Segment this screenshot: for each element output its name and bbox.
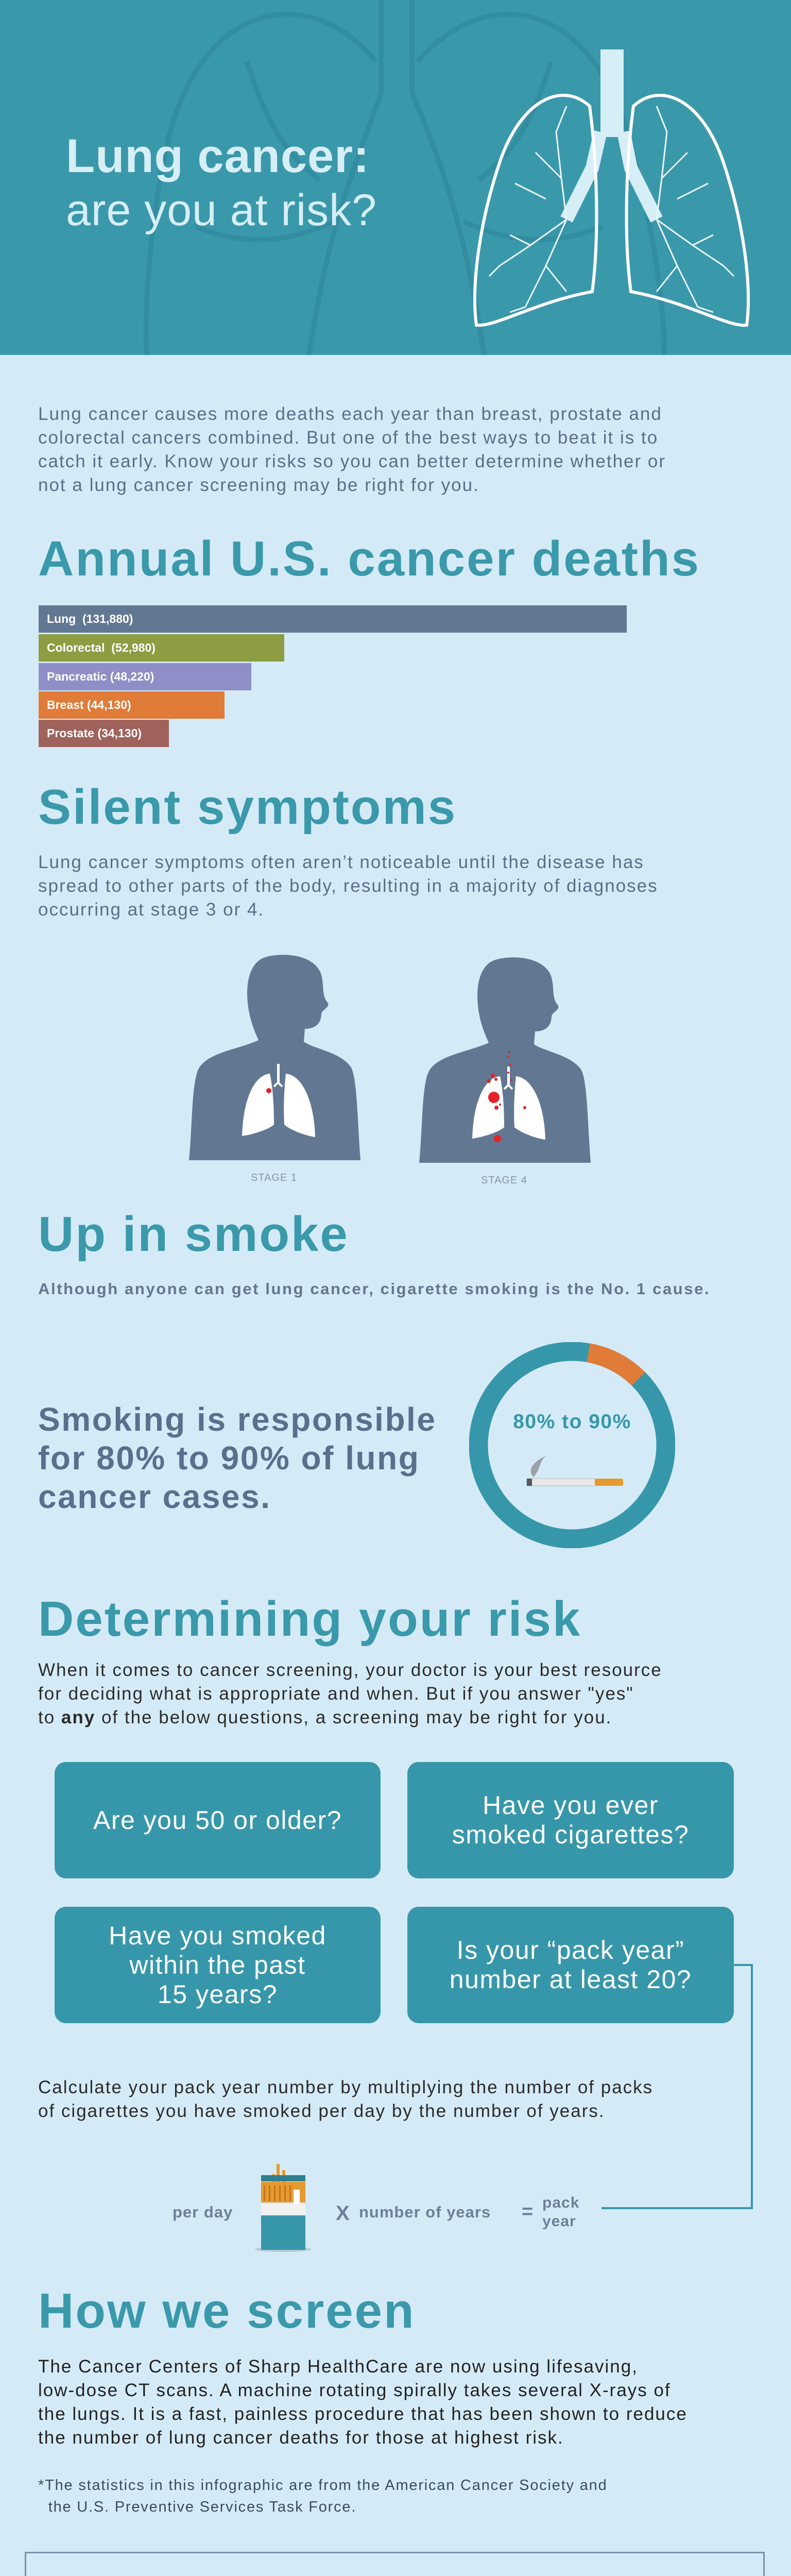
- intro text: Lung cancer causes more deaths each year than breast, prostate and: [38, 404, 662, 424]
- arrow: bracket connector: [601, 1964, 753, 2209]
- question box 3: within the past: [129, 1951, 306, 1979]
- formula: number of years: [359, 2203, 491, 2221]
- risk text: for deciding what is appropriate and when. But if you answer "yes": [38, 1684, 634, 1704]
- question box 4: [407, 1907, 734, 2023]
- formula: [173, 2164, 579, 2252]
- background faint lungs: [144, 0, 667, 355]
- bar: lung: Lung (131,880): [47, 612, 133, 625]
- title: [66, 130, 377, 235]
- formula: year: [542, 2213, 576, 2230]
- bar: pancreatic: [39, 663, 251, 690]
- smoke text: Although anyone can get lung cancer, cigarette smoking is the No. 1 cause.: [38, 1280, 710, 1298]
- heading: annual deaths: Annual U.S. cancer deaths: [38, 531, 700, 586]
- icon: lungs: [473, 49, 750, 327]
- question box 2: Have you ever: [483, 1791, 659, 1820]
- screen text: The Cancer Centers of Sharp HealthCare are now using lifesaving,: [38, 2357, 638, 2377]
- bar: prostate: Prostate (34,130): [47, 726, 142, 740]
- bar: pancreatic: Pancreatic (48,220): [47, 670, 154, 683]
- formula: pack: [542, 2194, 579, 2211]
- heading: silent symptoms: Silent symptoms: [38, 779, 457, 835]
- symptoms text: spread to other parts of the body, resulting in a majority of diagnoses: [38, 876, 658, 896]
- symptoms text: Lung cancer symptoms often aren’t noticeable until the disease has: [38, 852, 644, 872]
- footnote: [38, 2477, 608, 2515]
- intro text: colorectal cancers combined. But one of the best ways to beat it is to: [38, 428, 658, 448]
- bar: colorectal: Colorectal (52,980): [47, 641, 156, 654]
- bar chart: [39, 605, 627, 747]
- risk text: [38, 1660, 662, 1727]
- screen text: low-dose CT scans. A machine rotating spirally takes several X-rays of: [38, 2380, 671, 2400]
- bar: lung: [39, 605, 627, 633]
- intro text: not a lung cancer screening may be right for you.: [38, 475, 479, 495]
- bar: breast: Breast (44,130): [47, 698, 131, 711]
- screen text: the number of lung cancer deaths for those at highest risk.: [38, 2428, 564, 2448]
- smoking stat text: for 80% to 90% of lung: [38, 1439, 420, 1477]
- question box 1: Are you 50 or older?: [93, 1805, 342, 1834]
- smoking stat text: Smoking is responsible: [38, 1401, 436, 1438]
- formula: per day: [173, 2203, 233, 2221]
- question box 3: [55, 1907, 381, 2023]
- smoking stat text: [38, 1401, 436, 1515]
- icon: cigarette: [527, 1455, 623, 1486]
- bar: prostate: [39, 720, 169, 747]
- screen text: the lungs. It is a fast, painless procedure that has been shown to reduce: [38, 2404, 687, 2424]
- heading: determining risk: Determining your risk: [38, 1591, 581, 1647]
- footnote: the U.S. Preventive Services Task Force.: [48, 2499, 356, 2515]
- figure: stage 1: [189, 955, 360, 1183]
- screen text: [38, 2357, 687, 2448]
- label: stage 4: STAGE 4: [481, 1175, 527, 1186]
- smoking stat text: cancer cases.: [38, 1478, 271, 1515]
- figure: stage 4: [419, 957, 591, 1186]
- question box 4: Is your “pack year”: [457, 1936, 684, 1964]
- question box 1: [55, 1762, 381, 1878]
- formula: X: [336, 2202, 350, 2225]
- donut chart: 80% to 90%: [513, 1411, 631, 1433]
- bar: breast: [39, 691, 225, 719]
- header band: [0, 0, 791, 355]
- question box 2: smoked cigarettes?: [452, 1820, 689, 1849]
- question box 4: number at least 20?: [450, 1965, 692, 1994]
- label: stage 1: STAGE 1: [251, 1172, 297, 1183]
- pack year text: of cigarettes you have smoked per day by the number of years.: [38, 2101, 605, 2121]
- risk text: to any of the below questions, a screening may be right for you.: [38, 1707, 612, 1727]
- question box 3: 15 years?: [158, 1979, 278, 2008]
- donut chart: [469, 1342, 675, 1548]
- panel: about the expert: [25, 2552, 765, 2576]
- pack year text: Calculate your pack year number by multiplying the number of packs: [38, 2077, 653, 2097]
- intro text: catch it early. Know your risks so you can better determine whether or: [38, 451, 666, 471]
- question box 2: [407, 1762, 734, 1878]
- intro text: [38, 404, 666, 495]
- pack year text: [38, 2077, 653, 2121]
- symptoms text: [38, 852, 658, 920]
- heading: up in smoke: Up in smoke: [38, 1207, 349, 1262]
- formula: =: [522, 2201, 534, 2223]
- title: Lung cancer:: [66, 130, 370, 182]
- heading: how we screen: How we screen: [38, 2283, 416, 2338]
- risk text: When it comes to cancer screening, your doctor is your best resource: [38, 1660, 662, 1680]
- bar: colorectal: [39, 634, 284, 662]
- title: are you at risk?: [66, 185, 377, 235]
- icon: cigarette pack: [255, 2164, 312, 2252]
- footnote: *The statistics in this infographic are from the American Cancer Society and: [38, 2477, 608, 2494]
- symptoms text: occurring at stage 3 or 4.: [38, 900, 264, 920]
- question box 3: Have you smoked: [109, 1921, 326, 1950]
